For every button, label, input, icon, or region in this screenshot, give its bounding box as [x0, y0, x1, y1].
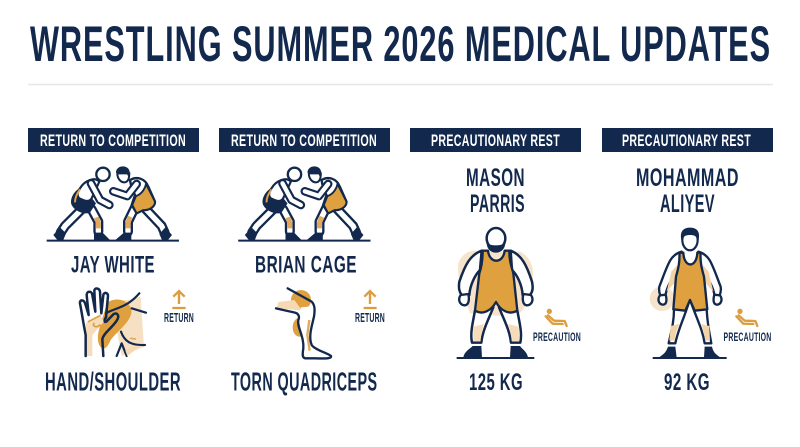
weight: 125 KG	[469, 369, 523, 396]
badge: return to competition: RETURN TO COMPETITION	[231, 131, 377, 150]
icon: 92 kg wrestler	[650, 228, 727, 358]
badge: precautionary rest	[602, 128, 773, 152]
name: PARRIS	[470, 190, 525, 218]
badge: precautionary rest: PRECAUTIONARY REST	[431, 131, 560, 150]
label: return: RETURN	[164, 311, 194, 325]
name: MOHAMMAD	[636, 164, 739, 192]
icon: two wrestlers	[238, 166, 370, 241]
badge: return to competition	[28, 128, 199, 152]
weight: 92 KG	[664, 369, 710, 396]
name: ALIYEV	[660, 190, 715, 218]
panel: Brian Cage	[219, 128, 390, 396]
badge: precautionary rest	[410, 128, 581, 152]
name	[466, 164, 525, 218]
name: JAY WHITE	[71, 252, 155, 278]
panel: Jay White	[28, 128, 199, 396]
label: precaution: PRECAUTION	[533, 332, 581, 344]
icon: injured hand and shoulder	[80, 289, 146, 356]
icon: heavyweight wrestler	[457, 228, 534, 358]
badge: return to competition: RETURN TO COMPETITION	[40, 131, 186, 150]
name: BRIAN CAGE	[255, 252, 357, 278]
panel: Mohammad Aliyev	[602, 128, 773, 396]
icon: precaution recliner	[546, 309, 567, 326]
icon: return arrow	[172, 291, 186, 308]
injury: TORN QUADRICEPS	[231, 366, 378, 396]
name: MASON	[466, 164, 525, 192]
icon: injured knee and leg	[276, 288, 331, 358]
icon: two wrestlers	[47, 166, 179, 241]
icon: return arrow	[364, 291, 377, 308]
injury: HAND/SHOULDER	[45, 366, 181, 396]
badge: return to competition	[219, 128, 390, 152]
name	[636, 164, 739, 218]
label: return: RETURN	[355, 311, 385, 325]
panel: Mason Parris	[410, 128, 581, 396]
icon: precaution recliner	[736, 309, 757, 326]
